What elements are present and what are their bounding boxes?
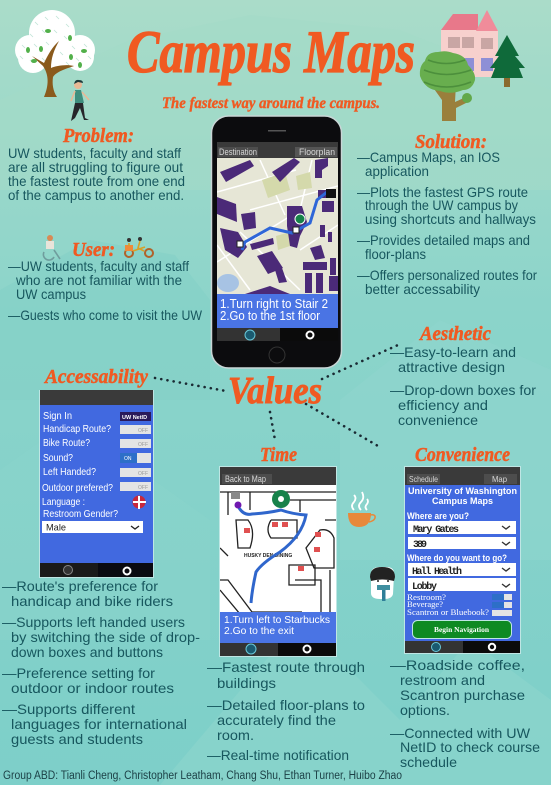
tab bar: [220, 643, 336, 656]
directions box: 2.Go to the exit: [224, 625, 294, 637]
accessability text: handicap and bike riders: [11, 593, 173, 609]
floor plan: [220, 485, 336, 620]
panel: user: [8, 235, 203, 323]
begin navigation button: Begin Navigation: [434, 625, 490, 634]
problem text: [8, 145, 185, 203]
settings phone screen: Male: [46, 522, 66, 534]
settings phone screen: Handicap Route?: [43, 424, 111, 435]
heading: problem: Problem:: [62, 125, 134, 147]
directions box: [217, 294, 338, 328]
footer credits: Group ABD: Tianli Cheng, Christopher Leatham, Chang Shu, Ethan Turner, Huibo Zhao: [3, 770, 402, 782]
heading: aesthetic: Aesthetic: [418, 323, 491, 345]
icon: bicycle riders: [125, 237, 153, 257]
navigation phone screen: 389: [413, 540, 427, 551]
convenience text: Scantron purchase: [400, 687, 525, 703]
problem text: of the campus to another end.: [8, 187, 184, 203]
accessability text: down boxes and buttons: [11, 644, 163, 660]
problem text: are all struggling to figure out: [8, 159, 183, 175]
convenience text: restroom and: [400, 672, 485, 688]
icon: green round tree: [420, 51, 475, 121]
solution text: [357, 149, 537, 297]
settings phone screen: OFF: [138, 428, 148, 434]
panel: time: [207, 444, 365, 763]
aesthetic text: —Easy-to-learn and: [390, 344, 516, 360]
heading: time: Time: [260, 444, 297, 466]
settings phone screen: Left Handed?: [43, 467, 96, 478]
solution text: —Plots the fastest GPS route: [357, 184, 528, 200]
time text: buildings: [217, 675, 276, 691]
problem text: UW students, faculty and staff: [8, 145, 181, 161]
panel: convenience: [390, 444, 540, 770]
accessability text: outdoor or indoor routes: [11, 680, 174, 696]
icon: pine tree: [490, 35, 525, 87]
settings phone screen: Outdoor prefered?: [42, 483, 113, 494]
navigation phone screen: [404, 466, 521, 654]
time text: —Real-time notification: [207, 747, 349, 763]
heading: convenience: Convenience: [415, 444, 510, 466]
icon: doctor character: [370, 567, 395, 601]
status and nav bar: Floorplan: [299, 147, 335, 158]
directions box: 1.Turn right to Stair 2: [220, 297, 328, 311]
user text: who are not familiar with the: [15, 272, 182, 288]
solution text: —Provides detailed maps and: [357, 232, 530, 248]
convenience text: schedule: [400, 754, 457, 770]
settings phone screen: Language :: [42, 497, 85, 508]
user text: —UW students, faculty and staff: [8, 258, 189, 274]
tab bar: [217, 328, 338, 341]
settings phone screen: OFF: [138, 442, 148, 448]
solution text: —Offers personalized routes for: [357, 267, 537, 283]
accessability text: by switching the side of drop-: [11, 629, 200, 645]
aesthetic text: efficiency and: [398, 397, 488, 413]
navigation phone screen: Mary Gates: [413, 525, 459, 536]
icon: coffee cup: [348, 492, 375, 527]
panel: aesthetic: [390, 323, 536, 428]
icon: wheelchair: [43, 235, 60, 260]
icon: walking man: [71, 80, 89, 121]
accessability text: —Route's preference for: [2, 578, 158, 594]
time text: —Detailed floor-plans to: [207, 697, 365, 713]
problem text: the fastest route from one end: [8, 173, 185, 189]
icon: white tree: [15, 10, 95, 97]
settings phone screen: Bike Route?: [43, 438, 90, 449]
heading: user: User:: [72, 239, 115, 261]
title: Campus Maps: [127, 19, 415, 85]
settings phone screen: ON: [124, 456, 132, 462]
aesthetic text: —Drop-down boxes for: [390, 382, 536, 398]
convenience text: [390, 657, 540, 770]
accessability text: —Supports left handed users: [2, 614, 185, 630]
aesthetic text: attractive design: [398, 359, 505, 375]
settings phone screen: OFF: [138, 471, 148, 477]
directions box: [220, 612, 336, 643]
settings phone screen: [39, 390, 154, 578]
begin navigation button: [412, 620, 512, 638]
settings phone screen: Sign In: [43, 411, 72, 422]
navigation phone screen: University of Washington: [408, 486, 517, 497]
solution text: application: [365, 163, 429, 179]
convenience text: NetID to check course: [400, 739, 540, 755]
aesthetic text: convenience: [398, 412, 478, 428]
directions box: 1.Turn left to Starbucks: [224, 614, 330, 626]
panel: solution: [357, 131, 537, 297]
navigation phone screen: Where are you?: [407, 511, 469, 521]
status and nav bar: [217, 142, 338, 158]
heading: values: Values: [228, 370, 322, 412]
convenience text: —Roadside coffee,: [390, 657, 525, 673]
panel: problem: [8, 125, 185, 203]
route on map: [237, 189, 336, 250]
status and nav bar: Destination: [219, 147, 257, 158]
solution text: better accessability: [365, 281, 480, 297]
solution text: using shortcuts and hallways: [365, 211, 536, 227]
campus map: [217, 158, 338, 294]
convenience text: options.: [400, 702, 450, 718]
icon: pink house: [441, 10, 498, 77]
navigation phone screen: Campus Maps: [432, 496, 493, 507]
main phone: [212, 116, 342, 368]
floor plan: HUSKY DEN DINING: [244, 553, 292, 559]
user text: UW campus: [16, 286, 86, 302]
floorplan phone screen: [219, 466, 337, 657]
settings phone screen: OFF: [138, 485, 148, 491]
aesthetic text: [390, 344, 536, 428]
solution text: floor-plans: [365, 246, 426, 262]
navigation phone screen: Restroom?: [407, 592, 446, 602]
navigation phone screen: Lobby: [412, 581, 437, 593]
subtitle: The fastest way around the campus.: [162, 95, 380, 112]
settings phone screen: Restroom Gender?: [43, 509, 118, 520]
navigation phone screen: Schedule: [409, 474, 438, 484]
accessability text: languages for international: [11, 716, 187, 732]
time text: [207, 659, 365, 763]
time text: room.: [217, 727, 254, 743]
settings phone screen: UW NetID: [122, 415, 147, 421]
route on floor plan: [234, 502, 306, 603]
user text: [8, 258, 203, 323]
floorplan phone screen: Back to Map: [225, 474, 266, 484]
heading: solution: Solution:: [415, 131, 487, 153]
solution text: —Campus Maps, an IOS: [357, 149, 500, 165]
solution text: through the UW campus by: [365, 197, 518, 213]
accessability text: —Preference setting for: [2, 665, 155, 681]
user text: —Guests who come to visit the UW: [8, 307, 203, 323]
accessability text: [2, 578, 200, 747]
navigation phone screen: Where do you want to go?: [407, 553, 507, 563]
navigation phone screen: Hall Health: [412, 566, 462, 578]
time text: accurately find the: [217, 712, 336, 728]
accessability text: —Supports different: [2, 701, 135, 717]
navigation phone screen: Scantron or Bluebook?: [407, 607, 489, 617]
time text: —Fastest route through: [207, 659, 365, 675]
directions box: 2.Go to the 1st floor: [220, 309, 320, 323]
settings phone screen: Sound?: [43, 453, 73, 464]
accessability text: guests and students: [11, 731, 143, 747]
panel: accessability: [2, 366, 200, 747]
heading: accessability: Accessability: [43, 366, 148, 388]
navigation phone screen: Beverage?: [407, 599, 443, 609]
navigation phone screen: Map: [492, 474, 507, 484]
convenience text: —Connected with UW: [390, 725, 531, 741]
dotted connectors: [155, 345, 398, 446]
